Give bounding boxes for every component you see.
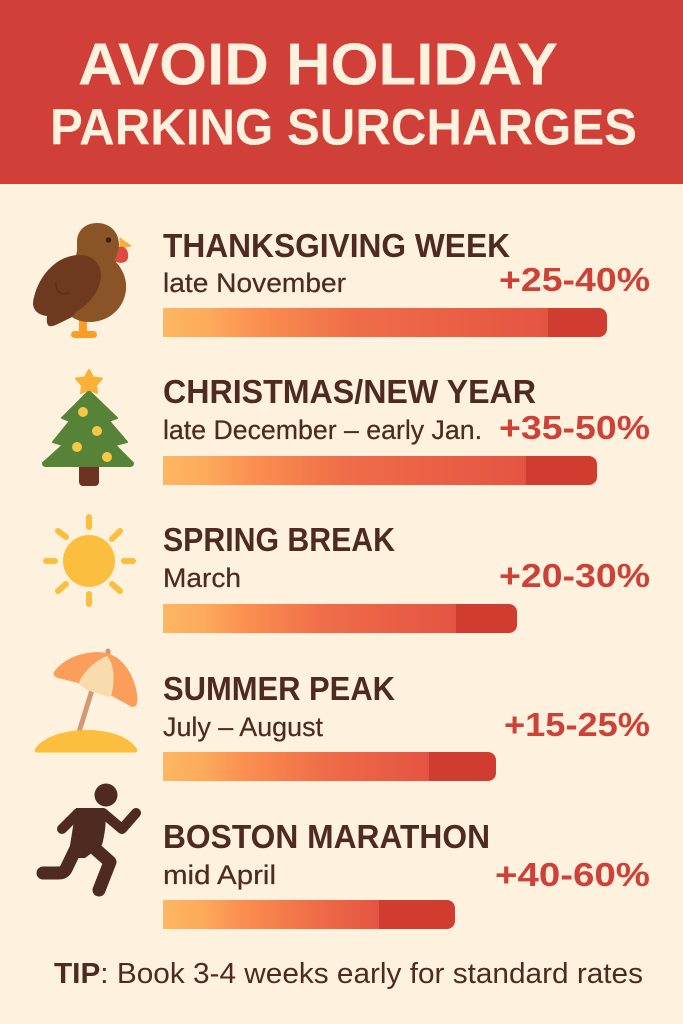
heading: SUMMER PEAK — [163, 670, 395, 707]
bar — [163, 456, 597, 485]
row: Spring break — [46, 517, 650, 633]
date range: July – August — [163, 712, 323, 742]
title banner — [0, 0, 683, 184]
icon: sun — [46, 517, 133, 604]
tip: TIP: Book 3-4 weeks early for standard rates — [54, 958, 643, 990]
icon: runner — [43, 784, 136, 890]
date range: mid April — [163, 860, 276, 890]
heading: CHRISTMAS/NEW YEAR — [163, 373, 536, 410]
row: Boston Marathon — [43, 784, 650, 929]
title line 2: PARKING SURCHARGES — [50, 98, 637, 156]
bar — [163, 308, 607, 337]
surcharge: +35-50% — [499, 409, 650, 446]
date range: late November — [163, 268, 346, 298]
surcharge: +20-30% — [499, 557, 650, 594]
surcharge: +40-60% — [495, 856, 650, 893]
date range: late December – early Jan. — [163, 415, 482, 445]
row: Thanksgiving week — [33, 223, 650, 338]
surcharge: +25-40% — [499, 261, 650, 298]
bar — [163, 752, 496, 781]
date range: March — [163, 563, 241, 593]
icon: beach umbrella — [35, 651, 137, 752]
surcharge: +15-25% — [504, 706, 650, 743]
heading: BOSTON MARATHON — [163, 818, 490, 855]
title line 1: AVOID HOLIDAY — [78, 32, 558, 98]
icon: christmas tree — [43, 370, 133, 486]
icon: turkey — [33, 223, 131, 338]
bar — [163, 900, 455, 929]
row: Summer peak — [35, 651, 650, 781]
heading: THANKSGIVING WEEK — [163, 227, 510, 264]
row: Christmas / New Year — [43, 370, 650, 486]
heading: SPRING BREAK — [163, 521, 395, 558]
bar — [163, 604, 517, 633]
